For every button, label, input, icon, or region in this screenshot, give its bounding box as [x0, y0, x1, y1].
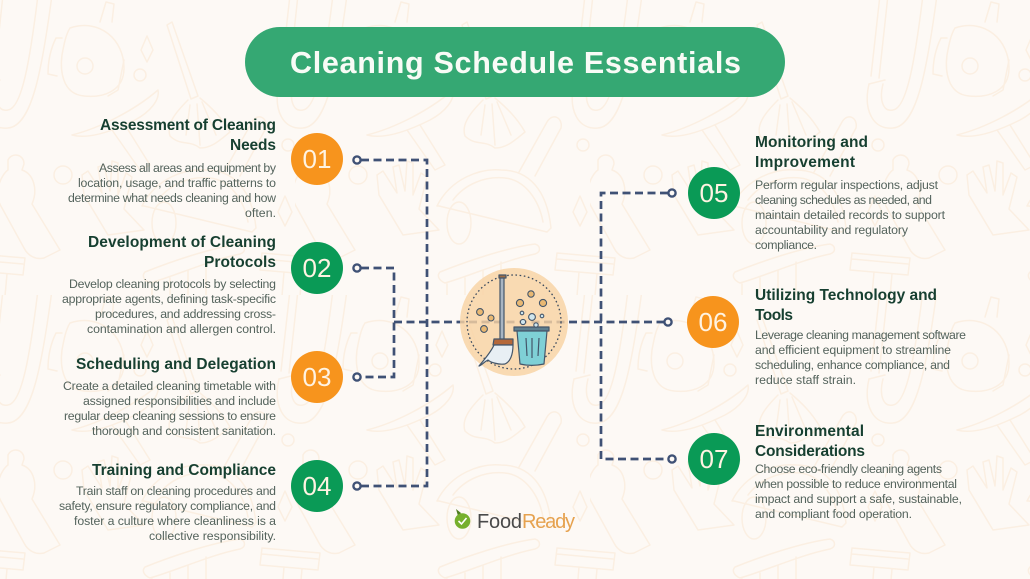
- heading 02: [88, 234, 276, 271]
- heading 07: Considerations: [755, 443, 865, 460]
- body 01: determine what needs cleaning and how: [68, 191, 276, 205]
- connector lines: [353, 156, 676, 490]
- badge 03: [291, 351, 343, 403]
- wordmark: Ready: [522, 511, 575, 533]
- body 04: collective responsibility.: [149, 529, 276, 543]
- body 05: [755, 178, 946, 252]
- wordmark: Food: [477, 511, 522, 533]
- body 07: [754, 462, 962, 521]
- right item 06: [687, 287, 966, 387]
- heading 02: Development of Cleaning: [88, 234, 276, 251]
- body 04: [59, 484, 276, 543]
- body 06: reduce staff strain.: [755, 373, 856, 387]
- heading 07: Environmental: [755, 423, 864, 440]
- body 07: and compliant food operation.: [755, 507, 912, 521]
- body 05: Perform regular inspections, adjust: [755, 178, 939, 192]
- badge 06: [687, 296, 739, 348]
- icon: stars and bubbles: [477, 291, 547, 332]
- left item 01: [68, 117, 343, 220]
- icon: bucket: [514, 327, 549, 366]
- icon: broom: [479, 275, 513, 366]
- heading 01: Needs: [230, 137, 276, 154]
- body 04: Train staff on cleaning procedures and: [76, 484, 276, 498]
- heading 05: Monitoring and: [755, 134, 868, 151]
- body 03: [63, 379, 276, 438]
- body 02: procedures, and addressing cross-: [95, 307, 276, 321]
- heading 05: Improvement: [755, 154, 855, 171]
- body 05: cleaning schedules as needed, and: [755, 193, 932, 207]
- left item 02: [62, 234, 343, 336]
- body 02: appropriate agents, defining task-specific: [62, 292, 276, 306]
- heading 07: [755, 423, 865, 460]
- body 03: regular deep cleaning sessions to ensure: [64, 409, 276, 423]
- right item 07: [688, 423, 962, 521]
- body 06: and efficient equipment to streamline: [755, 343, 951, 357]
- badge 05: [688, 167, 740, 219]
- body 05: maintain detailed records to support: [755, 208, 946, 222]
- badge 05: 05: [700, 178, 728, 208]
- badge 03: 03: [303, 362, 331, 392]
- badge 04: [291, 460, 343, 512]
- badge 06: 06: [699, 307, 727, 337]
- badge 02: 02: [303, 253, 331, 283]
- FoodReady logo: [455, 509, 575, 533]
- heading 01: Assessment of Cleaning: [100, 117, 276, 134]
- title banner: [245, 27, 785, 97]
- body 07: Choose eco-friendly cleaning agents: [755, 462, 942, 476]
- body 02: contamination and allergen control.: [87, 322, 276, 336]
- badge 04: 04: [303, 471, 331, 501]
- body 02: Develop cleaning protocols by selecting: [69, 277, 276, 291]
- heading 06: [755, 287, 937, 324]
- heading 04: Training and Compliance: [92, 462, 276, 479]
- badge 01: [291, 133, 343, 185]
- badge 01: 01: [303, 144, 331, 174]
- badge 02: [291, 242, 343, 294]
- wordmark: [477, 511, 575, 533]
- heading 02: Protocols: [204, 254, 276, 271]
- body 02: [62, 277, 276, 336]
- heading 05: [755, 134, 868, 171]
- body 05: compliance.: [755, 238, 817, 252]
- body 04: foster a culture where cleanliness is a: [74, 514, 276, 528]
- heading 03: Scheduling and Delegation: [76, 356, 276, 373]
- body 07: impact and support a safe, sustainable,: [755, 492, 962, 506]
- body 06: [755, 328, 966, 387]
- badge 07: 07: [700, 444, 728, 474]
- body 05: accountability and regulatory: [755, 223, 909, 237]
- heading 06: Utilizing Technology and: [755, 287, 937, 304]
- icon: apple: [455, 509, 470, 529]
- heading 06: Tools: [755, 307, 793, 324]
- badge 07: [688, 433, 740, 485]
- body 03: Create a detailed cleaning timetable with: [63, 379, 276, 393]
- body 07: when possible to reduce environmental: [754, 477, 957, 491]
- left item 04: [59, 460, 343, 543]
- heading 01: [100, 117, 276, 154]
- body 06: scheduling, enhance compliance, and: [755, 358, 950, 372]
- body 03: thorough and consistent sanitation.: [92, 424, 276, 438]
- body 06: Leverage cleaning management software: [755, 328, 966, 342]
- right item 05: [688, 134, 946, 252]
- body 04: safety, ensure regulatory compliance, and: [59, 499, 276, 513]
- left item 03: [63, 351, 343, 438]
- body 01: [68, 161, 277, 220]
- central cleaning icon: [460, 268, 568, 376]
- body 01: often.: [245, 206, 276, 220]
- body 01: location, usage, and traffic patterns to: [78, 176, 276, 190]
- body 01: Assess all areas and equipment by: [99, 161, 277, 175]
- body 03: assigned responsibilities and include: [83, 394, 276, 408]
- title banner: Cleaning Schedule Essentials: [290, 46, 741, 80]
